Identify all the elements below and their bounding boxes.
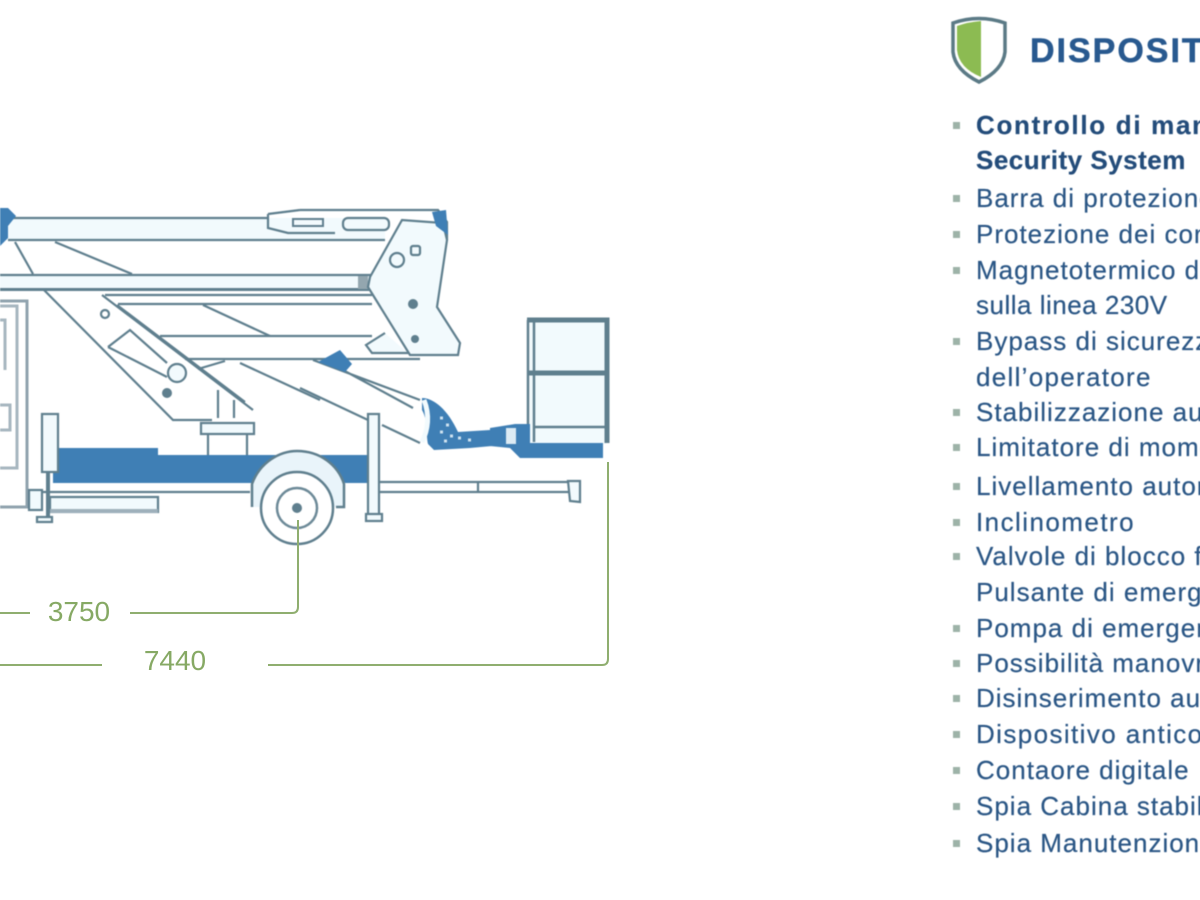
safety devices list: dell’operatore xyxy=(976,362,1152,392)
safety devices list: Valvole di blocco f xyxy=(976,541,1200,571)
cab xyxy=(0,301,27,507)
aerial platform truck drawing xyxy=(0,208,607,544)
shield icon xyxy=(953,18,1005,82)
safety devices list: Security System xyxy=(976,145,1186,175)
front outrigger xyxy=(29,414,58,522)
elbow plate xyxy=(366,210,460,355)
chassis xyxy=(30,448,370,513)
safety devices list: sulla linea 230V xyxy=(976,290,1168,320)
safety devices list xyxy=(953,110,1200,858)
safety devices list: Inclinometro xyxy=(976,507,1135,537)
lower arm and knuckle xyxy=(300,350,492,450)
wheel xyxy=(252,451,344,544)
dimension 7440: 7440 xyxy=(144,645,206,676)
lifting arm and cylinder xyxy=(44,290,320,420)
dimension 3750: 3750 xyxy=(48,596,110,627)
rear outrigger and rail xyxy=(366,414,580,521)
basket xyxy=(490,320,607,458)
middle boom xyxy=(0,275,420,359)
turret pedestal xyxy=(201,423,254,455)
upper boom xyxy=(0,208,447,274)
safety devices list: Contaore digitale xyxy=(976,755,1190,785)
dimension 7440 xyxy=(0,462,608,676)
dimension 3750 xyxy=(0,520,298,627)
